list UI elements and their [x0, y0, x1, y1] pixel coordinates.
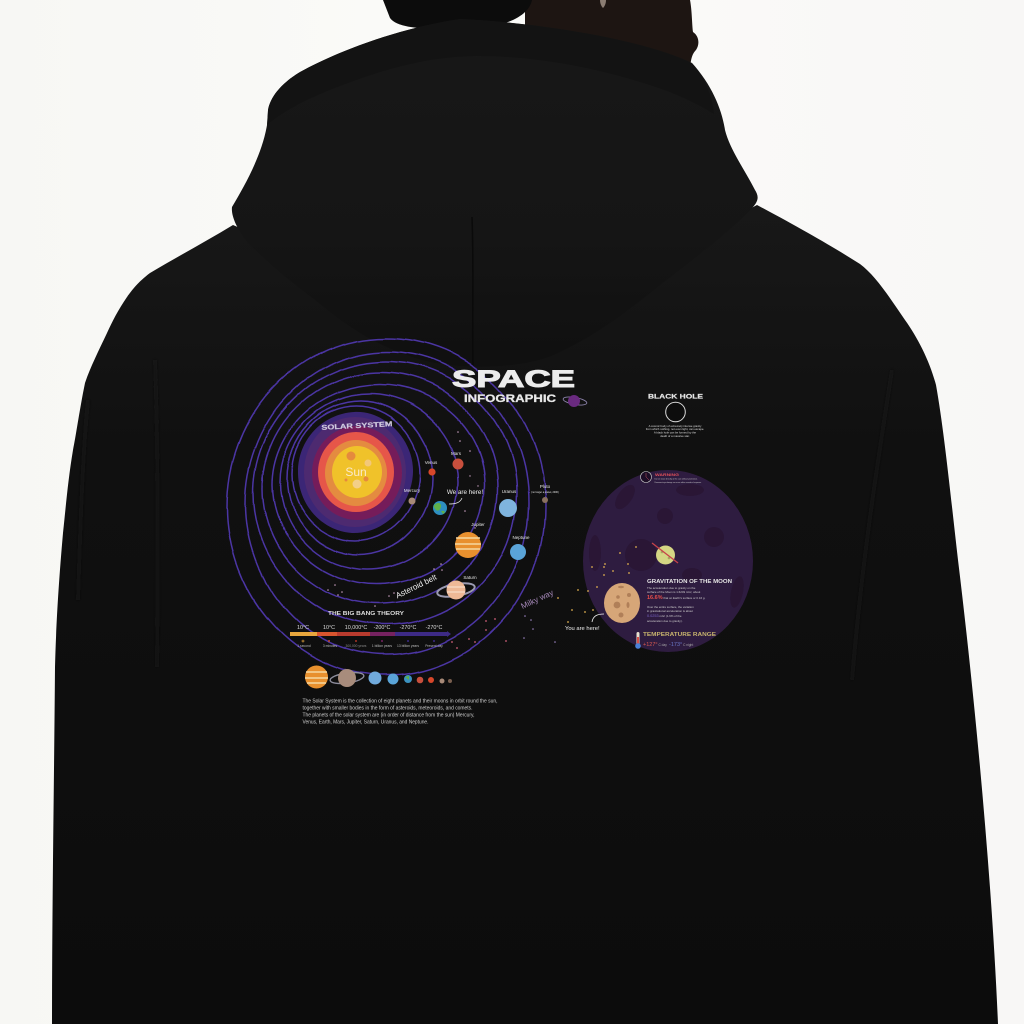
- title: INFOGRAPHIC: [464, 393, 556, 405]
- black hole ring: [666, 402, 685, 422]
- temperature title: TEMPERATURE RANGE: [643, 632, 716, 638]
- hood center seam: [472, 217, 473, 365]
- moon craters: [589, 482, 746, 609]
- planet labels: Venus: [425, 460, 438, 465]
- you are here callout: [565, 614, 604, 632]
- timeline times: 1 billion years: [372, 644, 392, 648]
- timeline temperatures: 10°C: [323, 625, 335, 631]
- black hole: from which nothing, not even light, can escape.: [646, 427, 704, 431]
- gravitation text: 0.0253 m/s² (1.6% of the: [647, 614, 682, 618]
- warning: Permanent eye damage can occur within seconds of exposure.: [654, 481, 702, 484]
- big moon: [604, 583, 640, 623]
- thermometer icon: [635, 632, 641, 649]
- warning: WARNING: [655, 473, 679, 477]
- timeline temperatures: -200°C: [374, 625, 391, 631]
- timeline times: 300,000 years: [346, 644, 367, 648]
- black hole: A black hole can be formed by the: [654, 430, 697, 434]
- model head and neck: [383, 0, 698, 75]
- big bang theory: [290, 611, 451, 648]
- sleeve seams: [78, 360, 892, 680]
- temperature values: +127° C day: [643, 642, 667, 648]
- solar system title: SOLAR SYSTEM: [321, 421, 393, 432]
- icon: purple planet: [563, 395, 587, 407]
- timeline dots: [302, 640, 435, 642]
- gravitation text: 16.6% that on Earth's surface or 0.16 g.: [647, 595, 705, 601]
- black hole: BLACK HOLE: [648, 394, 703, 400]
- you are here callout: You are here!: [565, 626, 600, 632]
- small moon: [652, 543, 678, 564]
- title: SPACE: [452, 366, 575, 393]
- gravitation text: acceleration due to gravity).: [647, 619, 683, 623]
- planet labels: (no longer a planet, 2006): [531, 491, 559, 494]
- planets in orbit: [408, 458, 548, 600]
- temperature values: -173° C night: [669, 642, 693, 648]
- timeline times: Present day: [425, 644, 443, 648]
- timeline times: 3 minutes: [323, 644, 337, 648]
- hoodie hood: [232, 22, 758, 365]
- planet labels: Neptune: [512, 535, 530, 540]
- timeline temperatures: 10°C: [297, 625, 309, 631]
- solar system description: The Solar System is the collection of eight planets and their moons in orbit round the sun,: [302, 698, 498, 704]
- planet labels: Mercury: [404, 488, 421, 493]
- hood collar band: [267, 19, 714, 125]
- moon stars: [587, 546, 637, 611]
- panel: moon: [583, 470, 753, 652]
- title: [452, 366, 575, 405]
- asteroid belt label: Asteroid belt: [394, 572, 439, 600]
- temperature values: [643, 642, 693, 648]
- solar system description: Venus, Earth, Mars, Jupiter, Saturn, Uranus, and Neptune.: [302, 720, 428, 726]
- planet labels: Jupiter: [471, 522, 485, 527]
- solar system description: The planets of the solar system are (in order of distance from the sun) Mercury,: [302, 712, 474, 718]
- sun: [298, 412, 413, 533]
- solar system description: together with smaller bodies in the form of asteroids, meteoroids, and comets.: [302, 706, 472, 712]
- planet labels: Saturn: [463, 575, 477, 580]
- hoodie body: [52, 205, 998, 1024]
- gravitation title: GRAVITATION OF THE MOON: [647, 579, 732, 585]
- we are here callout: We are here!: [447, 489, 483, 496]
- gravitation text: [647, 586, 705, 623]
- planet size row: [305, 666, 452, 688]
- we are here callout: [447, 489, 483, 504]
- timeline times: 1 second: [297, 644, 311, 648]
- scattered stars: [327, 431, 587, 649]
- black hole: death of a massive star.: [660, 434, 690, 438]
- warning: [640, 472, 702, 484]
- gravitation text: Over the entire surface, the variation: [647, 605, 694, 609]
- solar system orbits: [227, 338, 545, 676]
- planet labels: [404, 451, 559, 580]
- planet labels: Uranus: [502, 489, 517, 494]
- sun label: Sun: [345, 465, 367, 479]
- timeline temperatures: 10,000°C: [345, 625, 367, 631]
- gravitation text: in gravitational acceleration is about: [647, 609, 693, 613]
- solar system description: [302, 698, 498, 726]
- gravitation text: The acceleration due to gravity on the: [647, 586, 696, 590]
- big bang theory: THE BIG BANG THEORY: [328, 611, 404, 617]
- planet labels: Mars: [451, 451, 462, 456]
- timeline temperatures: [297, 625, 443, 631]
- milky way label: Milky way: [520, 588, 555, 611]
- planet labels: Pluto: [540, 484, 551, 489]
- black hole: [646, 394, 704, 438]
- black hole: A cosmic body of extremely intense gravity: [649, 424, 702, 428]
- timeline temperatures: -270°C: [426, 625, 443, 631]
- timeline bar: [290, 631, 451, 637]
- timeline temperatures: -270°C: [400, 625, 417, 631]
- warning: Do not stare directly at the sun without protection.: [654, 478, 698, 480]
- timeline times: 13 billion years: [397, 644, 419, 648]
- print artwork: [227, 338, 753, 726]
- gravitation text: surface of the Moon is 1.6249 m/s², about: [647, 590, 701, 594]
- timeline times: [297, 644, 443, 648]
